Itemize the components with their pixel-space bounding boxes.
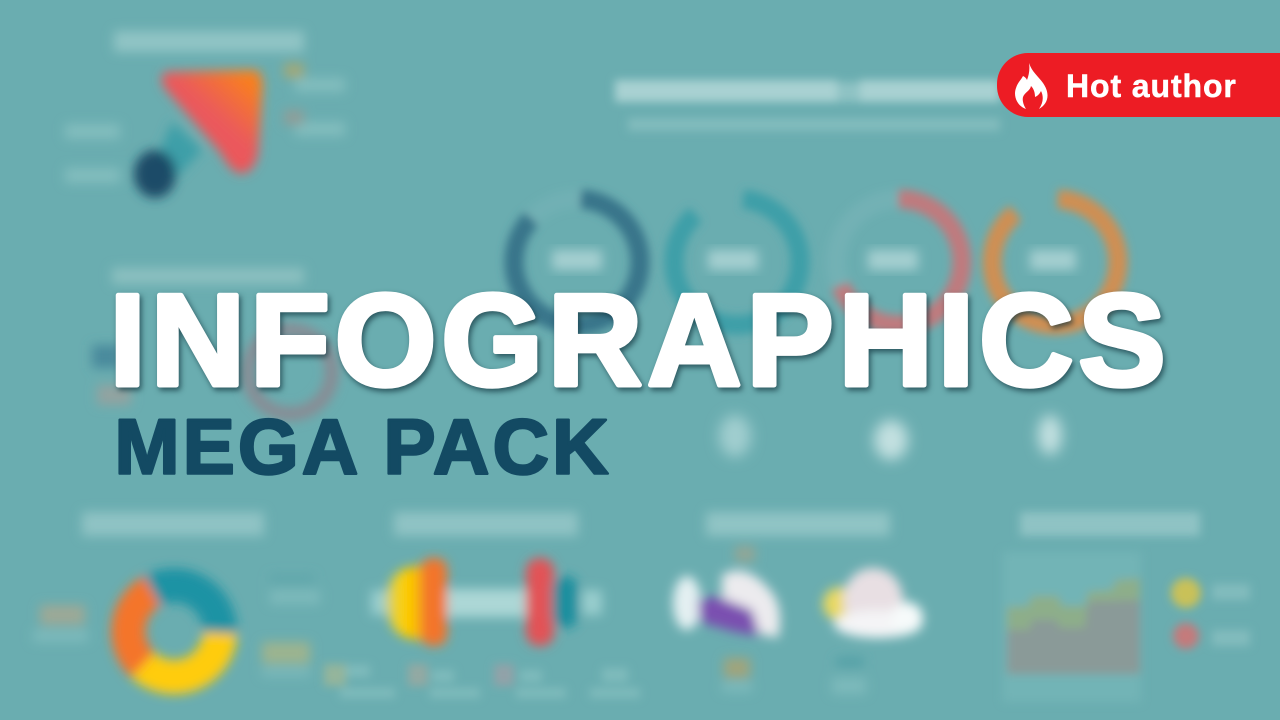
badge: hot author [997,53,1280,117]
pyramid base [134,150,176,198]
legend red [1173,623,1199,649]
donut orange segment [128,591,152,665]
donut yellow segment [143,633,220,677]
panel: area chart [1003,512,1250,702]
teal disc [552,576,578,628]
row of small legend items [324,664,640,698]
pyramid body [161,70,262,173]
ring icons [719,415,1062,460]
donut teal segment [152,585,220,633]
yellow disc [386,566,422,640]
left pictogram [673,546,780,692]
panel: brain and cloud pictograms [673,512,923,694]
title: INFOGRAPHICS [110,267,1166,413]
heading placeholder: dumbbell [394,512,578,536]
subtitle: MEGA PACK [114,402,608,490]
ring 2 [668,193,806,331]
donut labels [40,605,85,625]
heading placeholder: donut [82,512,264,536]
right pictogram: cloud [823,568,923,694]
orange disc [421,558,447,646]
ring 4 [989,196,1121,328]
ring 1 [510,195,644,329]
panel: bottom donut chart [33,512,320,677]
panel: dumbbell chart [371,512,602,646]
panel: progress rings [510,193,1121,331]
badge: hot author: Hot author [1066,68,1237,104]
heading placeholder: area chart [1020,512,1200,536]
center bar [447,589,527,617]
panel: top-left pyramid chart [65,31,345,198]
side labels [65,78,345,183]
ring center labels [552,250,1076,270]
green area [1007,578,1140,640]
pyramid stem [156,122,202,176]
panel: middle-left ring chart [92,268,332,414]
grey area [1007,600,1140,674]
icon: flame [1015,63,1048,109]
heading placeholder: pictograms [706,512,890,536]
red disc [526,558,554,646]
heading placeholder: top-left [114,31,304,52]
heading placeholder: top title [615,80,1000,131]
ring 3 [836,199,962,325]
legend yellow [1171,578,1201,608]
